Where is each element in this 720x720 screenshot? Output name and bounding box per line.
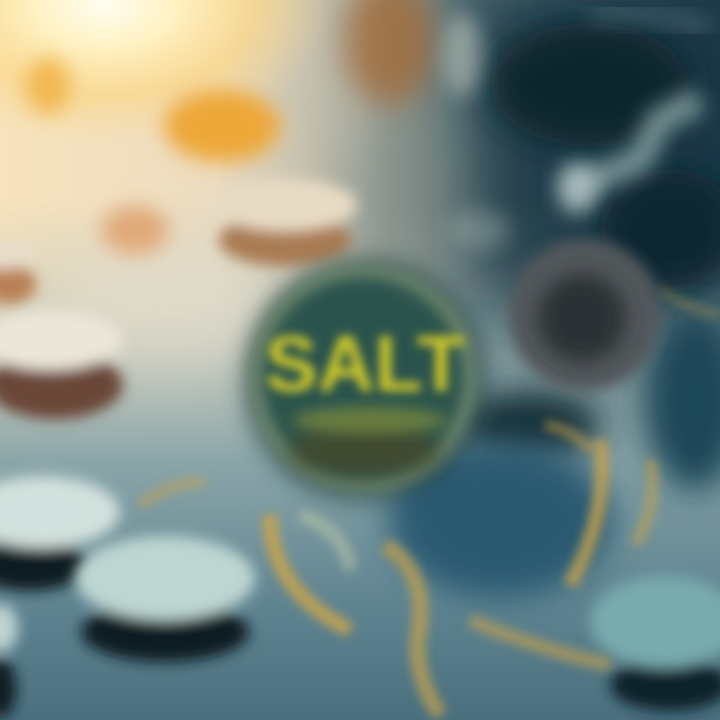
- label text: SALT: [265, 319, 465, 408]
- sun glow: [0, 0, 335, 145]
- bowl: lower centre dark: [75, 536, 255, 662]
- magnifying circle with label: [241, 256, 489, 504]
- dark shadow behind globe: [460, 391, 600, 459]
- dark storm clouds: [442, 0, 720, 490]
- bowl: far left partial: [0, 241, 36, 304]
- bowl: left brown: [0, 310, 123, 419]
- bowl: lower right teal: [590, 576, 720, 711]
- bowl: upper centre: [213, 179, 357, 266]
- orange bokeh lights: [26, 0, 436, 254]
- bowl: left dark: [0, 476, 120, 591]
- teal globe: [388, 442, 612, 598]
- bowl: bottom-left corner: [0, 604, 18, 718]
- gold chain: [140, 290, 720, 715]
- dark virus-like circle: [509, 239, 661, 391]
